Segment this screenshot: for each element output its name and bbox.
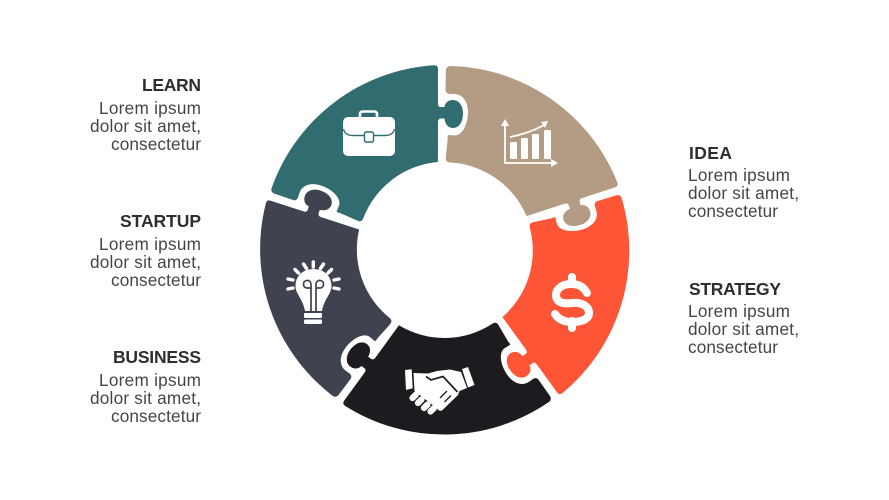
label: startup: consectetur	[111, 270, 201, 290]
label: learn: dolor sit amet,	[90, 116, 201, 136]
puzzle segment: startup (slate, light bulb)	[216, 176, 423, 406]
label: business	[90, 347, 201, 426]
label: idea: IDEA	[689, 143, 732, 163]
label: strategy: Lorem ipsum	[688, 301, 790, 321]
label: learn: Lorem ipsum	[99, 98, 201, 118]
label: learn	[90, 75, 201, 154]
label: idea	[688, 143, 799, 221]
label: business: consectetur	[111, 406, 201, 426]
label: strategy	[688, 279, 799, 357]
puzzle segment: idea (tan, chart)	[419, 28, 626, 258]
puzzle segment: learn (teal, briefcase)	[271, 65, 463, 221]
puzzle segment: strategy (orange, dollar)	[447, 171, 694, 410]
label: startup	[90, 211, 201, 290]
label: idea: Lorem ipsum	[688, 165, 790, 185]
label: idea: consectetur	[688, 201, 778, 221]
icon: handshake	[405, 367, 474, 412]
label: startup: Lorem ipsum	[99, 234, 201, 254]
label: startup: STARTUP	[120, 211, 201, 231]
puzzle segment: business (black, handshake)	[322, 263, 569, 500]
label: business: BUSINESS	[113, 347, 201, 367]
label: business: Lorem ipsum	[99, 370, 201, 390]
label: strategy: consectetur	[688, 337, 778, 357]
label: strategy: STRATEGY	[689, 279, 781, 299]
icon: light bulb	[288, 262, 339, 324]
icon: growth chart	[501, 119, 558, 167]
label: business: dolor sit amet,	[90, 388, 201, 408]
label: startup: dolor sit amet,	[90, 252, 201, 272]
label: learn: consectetur	[111, 134, 201, 154]
label: idea: dolor sit amet,	[688, 183, 799, 203]
label: learn: LEARN	[142, 75, 201, 95]
icon: briefcase	[343, 112, 395, 156]
icon: dollar sign	[555, 277, 589, 328]
label: strategy: dolor sit amet,	[688, 319, 799, 339]
